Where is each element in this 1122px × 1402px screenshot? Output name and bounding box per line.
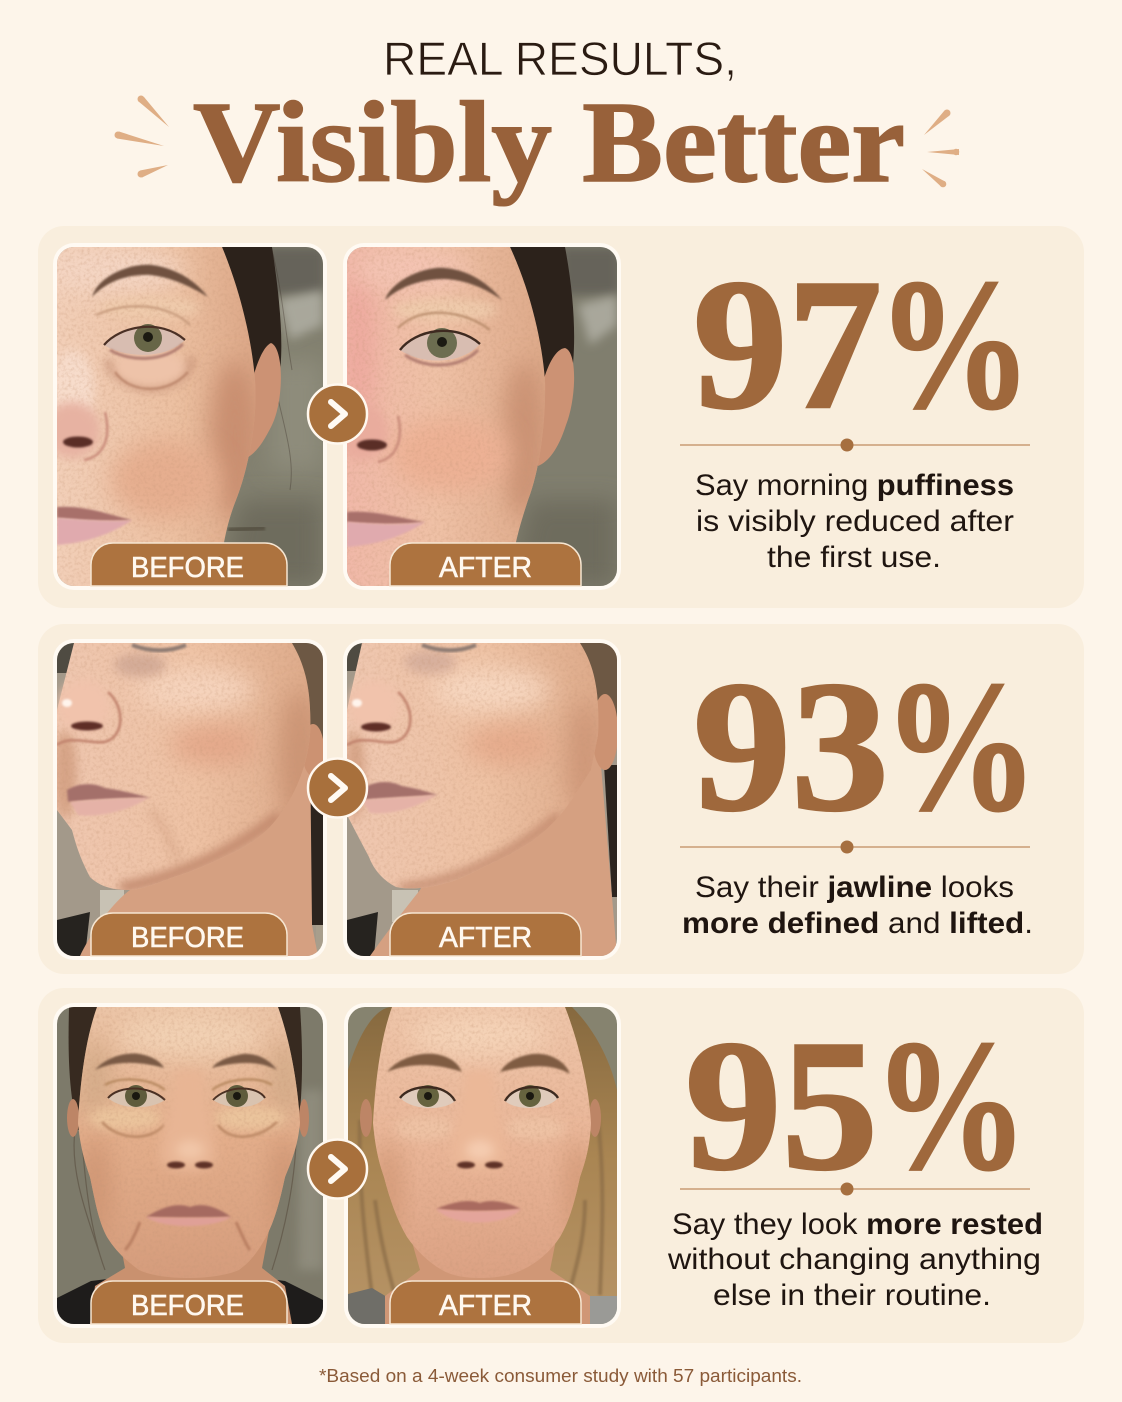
after label: AFTER <box>439 1290 532 1322</box>
eye <box>104 327 185 355</box>
eyes <box>109 1090 164 1108</box>
lips <box>347 512 425 524</box>
before label: BEFORE <box>131 552 244 584</box>
stat description <box>682 871 1033 940</box>
stat: 93% <box>693 643 1038 850</box>
stat description: is visibly reduced after <box>696 505 1014 538</box>
divider <box>680 840 1030 854</box>
photo: before, side face with under-eye puffiness <box>35 246 325 586</box>
stat description: Say they look more rested <box>672 1208 1043 1241</box>
title line one: REAL RESULTS, <box>383 32 737 85</box>
brow <box>92 265 208 297</box>
stat: 93%: % <box>883 643 1038 850</box>
stat description: else in their routine. <box>713 1279 991 1312</box>
panel: morning puffiness <box>35 226 1084 608</box>
stat description: Say morning puffiness <box>695 469 1014 502</box>
nose <box>347 415 387 458</box>
arrow <box>308 384 367 444</box>
after label: AFTER <box>439 552 532 584</box>
stat: 97% <box>693 241 1032 448</box>
after photo frame <box>343 243 621 590</box>
brow <box>385 268 502 300</box>
divider <box>680 438 1030 452</box>
brows <box>95 1053 164 1070</box>
nose <box>454 1073 502 1170</box>
stat: 95%: % <box>873 1002 1028 1209</box>
after photo frame <box>344 1003 621 1328</box>
after label <box>390 543 581 586</box>
icon: right sparkle rays <box>922 110 959 187</box>
photo: after, lifted jawline <box>345 643 618 956</box>
after label <box>390 1281 581 1324</box>
photo: after, frontal face with long hair <box>348 1007 617 1324</box>
brows <box>387 1054 462 1072</box>
lips <box>362 782 438 800</box>
before label: BEFORE <box>131 922 244 954</box>
before photo frame <box>53 639 327 960</box>
title <box>193 32 905 207</box>
before photo frame <box>53 1003 327 1328</box>
before label <box>91 913 287 956</box>
panel: jawline <box>38 624 1084 974</box>
before label <box>91 1281 287 1324</box>
stat description: more defined and lifted. <box>682 907 1033 940</box>
nose <box>347 682 394 724</box>
icon: left sparkle rays <box>114 96 169 178</box>
lips <box>67 784 151 802</box>
stat: 93%: 93 <box>693 643 889 850</box>
title line two: Visibly Better <box>193 79 905 207</box>
stat: 95% <box>685 1002 1028 1209</box>
arrow <box>308 758 367 818</box>
photo: before, three-quarter jawline <box>53 643 326 960</box>
stat description: the first use. <box>767 541 941 574</box>
eye bags <box>102 1122 164 1137</box>
nose <box>57 682 107 722</box>
footnote: *Based on a 4-week consumer study with 57 participants. <box>319 1366 802 1386</box>
panel: more rested <box>38 988 1084 1343</box>
after label <box>390 913 581 956</box>
nose <box>161 1078 214 1172</box>
stat: 97%: % <box>877 241 1032 448</box>
stat description <box>695 469 1014 574</box>
mouth <box>146 1205 231 1218</box>
mouth <box>436 1201 521 1211</box>
photo: before, frontal face <box>57 1007 323 1324</box>
nose <box>57 398 102 460</box>
before label <box>91 543 287 586</box>
eyes <box>400 1087 455 1108</box>
before label: BEFORE <box>131 1290 244 1322</box>
lips <box>57 507 132 521</box>
stat description <box>667 1208 1043 1312</box>
divider <box>680 1182 1030 1196</box>
stat description: without changing anything <box>667 1243 1041 1276</box>
after label: AFTER <box>439 922 532 954</box>
before photo frame <box>53 243 327 590</box>
eye <box>400 331 480 361</box>
under-eye bag <box>108 358 192 387</box>
stat: 95%: 95 <box>685 1002 878 1209</box>
arrow <box>308 1140 367 1198</box>
photo: after, side face with reduced puffiness <box>336 247 620 586</box>
stat description: Say their jawline looks <box>695 871 1014 904</box>
stat: 97%: 97 <box>693 241 882 448</box>
after photo frame <box>343 639 621 960</box>
